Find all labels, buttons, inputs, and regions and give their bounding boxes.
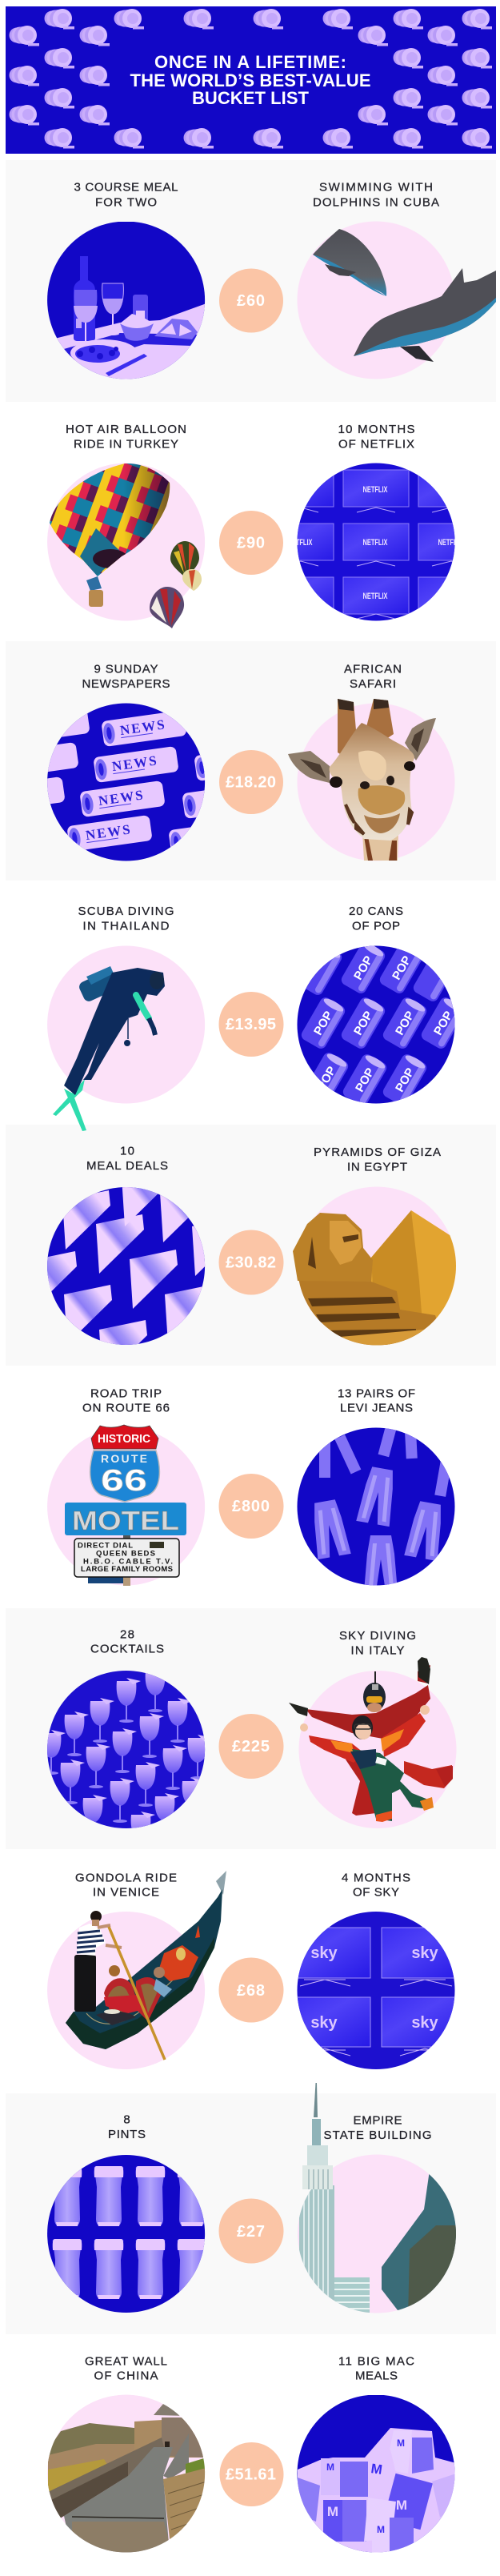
illustration: sky TVs: sky [411,1944,439,1962]
heading: cans of pop [349,905,403,933]
row 1: meal vs dolphins [47,181,496,384]
price: £51.61 [219,2442,283,2506]
price: £30.82: £30.82 [226,1254,276,1271]
illustration: cans of pop: POP [390,953,414,982]
illustration: sky TVs: sky [310,2014,338,2032]
row 2: balloon vs netflix [44,423,484,628]
heading: pyramids [314,1146,441,1174]
heading: swimming with dolphins: SWIMMING WITH [319,181,433,194]
heading: big macs: 11 BIG MAC [338,2355,414,2368]
heading: hot air balloon: RIDE IN TURKEY [74,437,178,451]
heading: hot air balloon: HOT AIR BALLOON [66,423,186,436]
illustration: netflix TVs: NETFLIX [363,592,388,601]
heading: gondola ride: IN VENICE [93,1886,159,1899]
illustration: newspapers: NEWS [111,752,158,774]
heading: pyramids: IN EGYPT [347,1161,407,1174]
heading: netflix: 10 MONTHS [338,423,414,436]
price: £225: £225 [232,1738,270,1755]
price: £13.95: £13.95 [226,1016,276,1033]
row 4: scuba vs pop [47,905,467,1131]
illustration: levi jeans [297,1426,455,1591]
illustration: newspapers: NEWS [98,787,144,809]
title [130,52,371,108]
illustration: route 66 motel sign: DIRECT DIAL [78,1542,133,1550]
panel: row 1 background [6,160,496,402]
heading: meal deals: 10 [120,1145,134,1158]
heading: meal deals [86,1145,168,1173]
illustration: big mac meals: M [377,2524,385,2535]
row 3: newspapers vs safari [47,664,454,861]
price: £30.82 [219,1230,283,1295]
heading: big macs: MEALS [355,2369,398,2382]
illustration: newspapers [47,703,205,861]
illustration: cans of pop: POP [393,1009,418,1037]
heading: empire state: STATE BUILDING [323,2129,432,2142]
price: £51.61: £51.61 [226,2466,276,2483]
price: £13.95 [219,992,283,1057]
heading: pints: 8 [123,2113,130,2126]
heading: sky: OF SKY [353,1886,399,1899]
heading: levi jeans: 13 PAIRS OF [338,1386,415,1401]
heading: pints [108,2113,146,2141]
illustration: route 66 motel sign: H.B.O. CABLE T.V. [83,1558,173,1566]
illustration: pints [47,2155,206,2313]
heading: scuba diving: IN THAILAND [83,919,170,933]
heading: 3 course meal: 3 COURSE MEAL [74,181,178,194]
heading: netflix: OF NETFLIX [338,437,414,451]
heading: great wall: GREAT WALL [85,2355,167,2368]
illustration: cans of pop: POP [311,1009,336,1037]
heading: african safari: SAFARI [350,677,396,691]
heading: great wall: OF CHINA [94,2369,158,2382]
heading: cans of pop: OF POP [352,919,400,933]
price: £90: £90 [237,535,265,552]
price: £800 [219,1474,283,1539]
price: £27 [219,2198,283,2264]
price: £68: £68 [237,1982,265,2000]
illustration: big mac meals: M [397,2438,405,2449]
heading: 3 course meal [74,181,178,210]
illustration: big mac meals [297,2395,456,2555]
illustration: cans of pop: POP [314,1064,339,1093]
price: £60 [219,269,283,333]
row 6: route 66 vs jeans [47,1386,455,1591]
illustration: cocktails [47,1671,205,1828]
heading: swimming with dolphins [313,181,439,210]
heading: gondola ride [75,1872,177,1899]
heading: road trip: ON ROUTE 66 [82,1401,170,1415]
heading: cocktails: 28 [120,1628,134,1641]
illustration: sphinx and pyramid [293,1186,464,1353]
price: £90 [219,511,283,575]
heading: cocktails [90,1628,164,1655]
heading: swimming with dolphins: DOLPHINS IN CUBA [313,195,439,210]
title: THE WORLD’S BEST-VALUE [130,70,371,90]
illustration: big mac meals: M [327,2504,338,2519]
illustration: newspapers: NEWS [119,716,166,738]
illustration: cans of pop: POP [351,1009,376,1037]
heading: sky [342,1872,410,1899]
price: £60: £60 [237,292,265,310]
heading: 3 course meal: FOR TWO [95,195,157,210]
illustration: big mac meals: M [370,2461,383,2478]
heading: netflix [338,423,414,451]
heading: empire state [323,2113,432,2142]
illustration: netflix TVs: NETFLIX [438,538,463,548]
illustration: cans of pop: POP [351,953,376,982]
illustration: newspapers: NEWS [85,821,131,843]
heading: african safari: AFRICAN [344,663,402,676]
illustration: gondola [47,1871,226,2069]
illustration: scuba diver [47,946,205,1131]
illustration: cans of pop: POP [393,1065,418,1094]
illustration: cans of pop: POP [353,1065,378,1094]
price: £225 [219,1714,283,1779]
row 5: meal deals vs pyramids [47,1146,456,1345]
illustration: route 66 motel sign: 66 [101,1464,147,1498]
illustration: big mac meals: M [396,2498,407,2513]
price: £800: £800 [232,1498,270,1515]
illustration: route 66 motel sign: MOTEL [72,1506,179,1535]
panel: row 7 background [6,1608,496,1849]
heading: meal deals: MEAL DEALS [86,1159,168,1173]
heading: sky diving: SKY DIVING [339,1629,416,1643]
price: £18.20 [219,750,283,814]
heading: sky: 4 MONTHS [342,1872,410,1884]
illustration: sky TVs: sky [411,2014,439,2032]
heading: sky diving: IN ITALY [350,1644,405,1657]
heading: sky diving [339,1629,416,1657]
illustration: meal deal sandwiches [47,1187,205,1345]
illustration: cans of pop [298,946,454,1103]
illustration: sky TVs: sky [310,1944,338,1962]
price: £68 [219,1958,283,2022]
illustration: netflix TVs: NETFLIX [363,485,388,495]
header pattern: stacked plates [10,9,492,149]
heading: scuba diving: SCUBA DIVING [78,905,174,918]
heading: pints: PINTS [108,2128,146,2141]
illustration: route 66 motel sign: ROUTE [101,1452,147,1465]
illustration: route 66 motel sign: HISTORIC [98,1433,150,1446]
panel: row 9 background [6,2093,496,2334]
heading: gondola ride: GONDOLA RIDE [75,1872,177,1884]
heading: sunday newspapers [82,663,170,691]
row 9: pints vs empire state [47,2083,460,2317]
heading: sunday newspapers: NEWSPAPERS [82,677,170,691]
illustration: netflix TVs: NETFLIX [288,538,313,548]
illustration: great wall of china [47,2395,206,2554]
heading: road trip [82,1386,170,1415]
panel: row 5 background [6,1125,496,1366]
heading: cocktails: COCKTAILS [90,1643,164,1655]
illustration: netflix TVs: NETFLIX [363,538,388,548]
row 7: cocktails vs sky diving [47,1630,456,1828]
price: £27: £27 [237,2223,265,2241]
illustration: big mac meals: M [326,2462,334,2473]
title: ONCE IN A LIFETIME: [154,52,346,72]
title: BUCKET LIST [192,88,310,108]
heading: sunday newspapers: 9 SUNDAY [94,663,158,676]
row 8: gondola vs sky [47,1871,464,2070]
illustration: hot air balloons [44,460,205,628]
illustration: tandem skydivers [289,1657,456,1828]
illustration: giraffe [288,699,454,861]
heading: hot air balloon [66,423,186,451]
heading: scuba diving [78,905,174,933]
price: £18.20: £18.20 [226,773,276,791]
header banner [6,6,496,154]
illustration: netflix TVs [298,463,454,621]
heading: african safari [344,663,402,691]
illustration: route 66 motel sign [47,1425,205,1586]
heading: cans of pop: 20 CANS [349,905,403,918]
heading: levi jeans [338,1386,415,1415]
illustration: route 66 motel sign: LARGE FAMILY ROOMS [81,1565,173,1574]
illustration: three course meal [47,222,206,384]
panel: row 3 background [6,641,496,881]
illustration: dolphins [298,221,496,379]
illustration: empire state building [298,2083,460,2317]
heading: pyramids: PYRAMIDS OF GIZA [314,1146,441,1159]
heading: levi jeans: LEVI JEANS [340,1401,413,1415]
heading: big macs [338,2355,414,2382]
heading: road trip: ROAD TRIP [90,1386,162,1401]
illustration: route 66 motel sign: QUEEN BEDS [96,1550,155,1558]
heading: great wall [85,2355,167,2382]
row 10: great wall vs big macs [47,2355,456,2555]
illustration: cans of pop: POP [431,1009,456,1037]
heading: empire state: EMPIRE [354,2113,402,2128]
illustration: sky TVs [298,1912,454,2069]
